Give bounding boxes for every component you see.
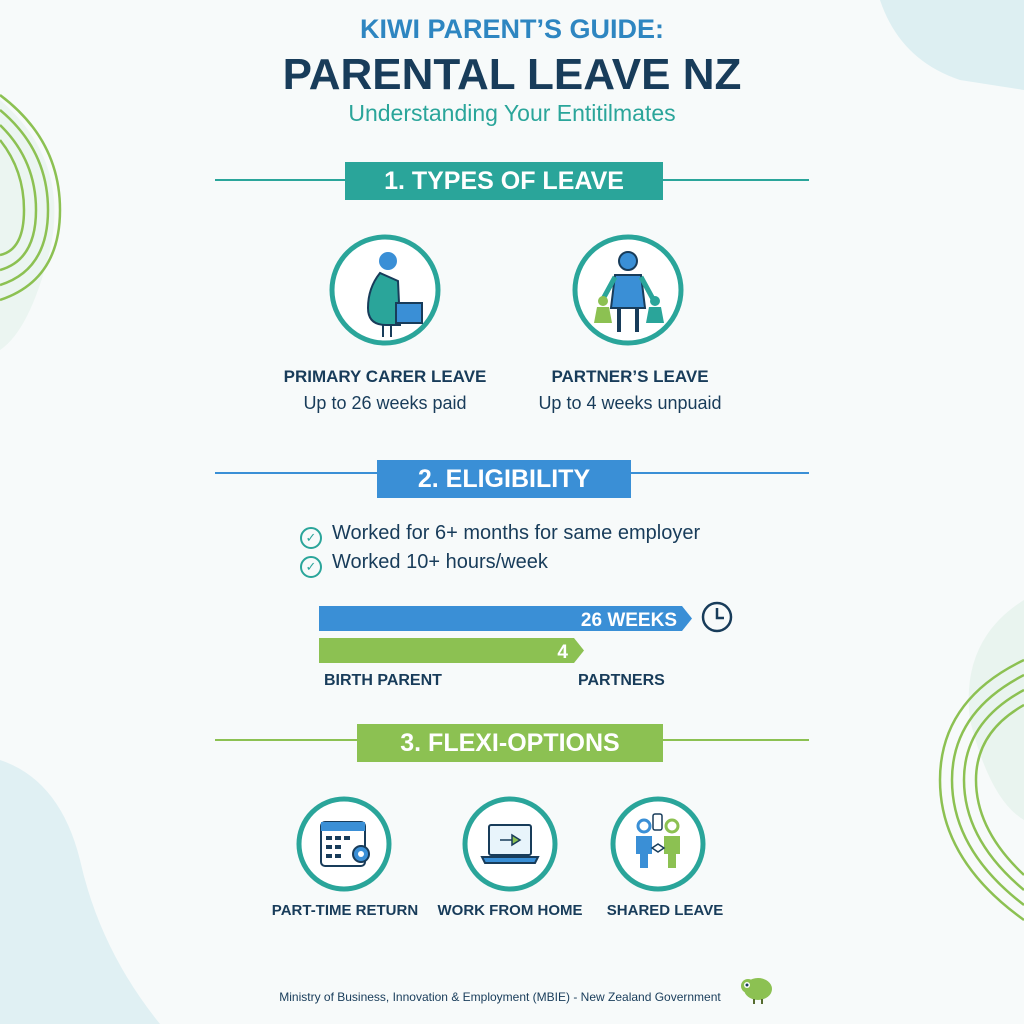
icon: kiwi bird — [741, 978, 772, 1004]
text: partner's leave: PARTNER’S LEAVE — [551, 367, 709, 386]
section 1 header: 1. TYPES OF LEAVE — [384, 167, 624, 195]
icon: laptop — [462, 796, 558, 892]
section 3 header: 3. FLEXI-OPTIONS — [400, 729, 620, 757]
section 2 header: 2. ELIGIBILITY — [418, 465, 590, 493]
icon: calendar — [296, 796, 392, 892]
main title: PARENTAL LEAVE NZ — [283, 50, 741, 99]
text: partner's leave — [538, 367, 722, 413]
flexi labels — [272, 902, 723, 919]
icon: partner with children — [572, 234, 684, 346]
text: primary carer leave: Up to 26 weeks paid — [303, 393, 467, 413]
bar chart: 4 — [557, 642, 568, 663]
subtitle: Understanding Your Entitilmates — [348, 100, 676, 126]
flexi labels: PART-TIME RETURN — [272, 902, 418, 919]
bar chart: BIRTH PARENT — [324, 672, 442, 689]
footer: Ministry of Business, Innovation & Employment (MBIE) - New Zealand Government — [279, 990, 721, 1004]
text: primary carer leave — [284, 367, 486, 413]
title: KIWI PARENT’S GUIDE: — [360, 14, 664, 44]
flexi labels: WORK FROM HOME — [438, 902, 582, 919]
checklist — [300, 522, 700, 578]
text: primary carer leave: PRIMARY CARER LEAVE — [284, 367, 486, 386]
text: partner's leave: Up to 4 weeks unpuaid — [538, 393, 722, 413]
checklist: Worked 10+ hours/week — [332, 551, 548, 573]
checklist: ✓ — [306, 530, 316, 545]
bar chart: 26 WEEKS — [581, 610, 677, 631]
checklist: ✓ — [306, 559, 316, 574]
bar chart: PARTNERS — [578, 672, 665, 689]
icon: shared leave — [610, 796, 706, 892]
flexi labels: SHARED LEAVE — [607, 902, 723, 919]
bar chart — [319, 602, 732, 689]
checklist: Worked for 6+ months for same employer — [332, 522, 700, 544]
icon: pregnant carer — [330, 234, 440, 346]
